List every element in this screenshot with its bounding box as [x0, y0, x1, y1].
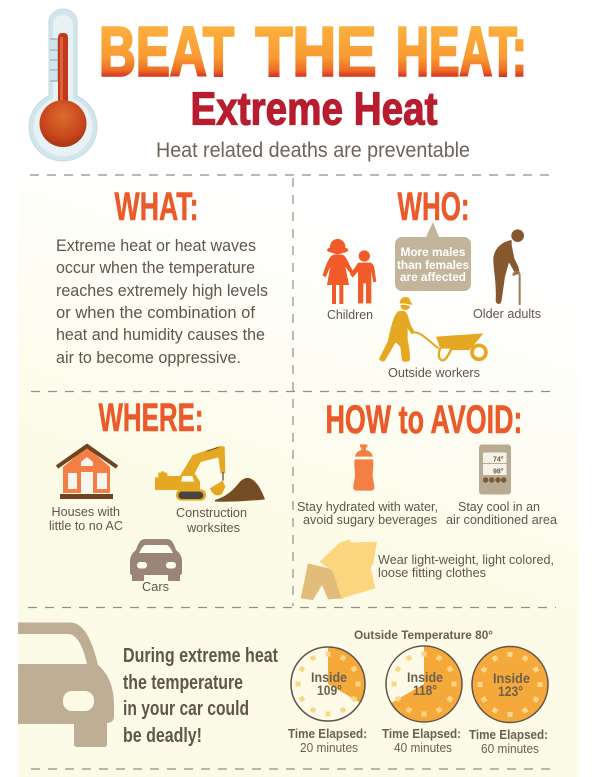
what body text: heat and humidity causes the [56, 326, 265, 344]
callout: more males: More males [400, 245, 466, 259]
icon: water bottle [353, 444, 374, 491]
callout: more males [395, 222, 471, 291]
title [99, 13, 527, 91]
icon: older adult [493, 229, 524, 305]
label: clothes [378, 552, 554, 580]
what body text: or when the combination of [56, 304, 255, 322]
label: houses: Houses with [52, 504, 120, 519]
label: stay cool: air conditioned area [446, 512, 558, 527]
icon: children [323, 239, 376, 304]
callout: more males: than females [397, 258, 469, 272]
chart: 20 minutes clock: Inside [311, 669, 347, 685]
label: older adults: Older adults [473, 306, 541, 321]
what body text: occur when the temperature [56, 259, 255, 277]
chart: 40 minutes clock: Inside [407, 669, 443, 685]
title: BEAT [99, 13, 234, 91]
label: 60 minutes: 60 minutes [481, 742, 539, 756]
heading: where: WHERE: [98, 396, 204, 440]
callout: more males: are affected [400, 270, 466, 284]
label: children: Children [327, 307, 373, 322]
panel: what [56, 185, 268, 367]
subtitle: Extreme Heat: Extreme Heat [190, 82, 438, 134]
label: stay cool [446, 499, 558, 527]
label: construction: Construction [176, 505, 247, 520]
icon: thermometer [29, 9, 97, 161]
chart: 60 minutes clock [472, 646, 548, 722]
title: HEAT: [396, 13, 527, 91]
icon: large car [18, 622, 114, 747]
label: stay hydrated: Stay hydrated with water, [297, 499, 438, 514]
warning text [123, 645, 278, 747]
icon: house [57, 446, 117, 499]
label: clothes: Wear light-weight, light colored, [378, 552, 554, 567]
label: 40 minutes [382, 727, 461, 755]
background wash [18, 178, 578, 777]
title: THE [256, 13, 376, 91]
panel: who [323, 185, 541, 380]
label: construction [176, 505, 247, 535]
label: 60 minutes: Time Elapsed: [469, 728, 548, 742]
icon: excavator [155, 446, 265, 502]
icon: car [130, 539, 182, 581]
chart: 40 minutes clock: 118° [413, 682, 437, 698]
warning text: in your car could [123, 698, 249, 720]
label: stay hydrated: avoid sugary beverages [303, 512, 437, 527]
label: stay cool: Stay cool in an [458, 499, 540, 514]
panel: car warning [18, 622, 548, 756]
label: 20 minutes [288, 727, 367, 755]
heading: who: WHO: [398, 185, 470, 229]
icon: thermostat [479, 444, 511, 494]
label: houses [49, 504, 123, 533]
panel: where [49, 396, 265, 594]
label: 60 minutes [469, 728, 548, 756]
label: stay hydrated [297, 499, 438, 527]
label: 40 minutes: Time Elapsed: [382, 727, 461, 741]
label: construction: worksites [186, 520, 240, 535]
label: 20 minutes: Time Elapsed: [288, 727, 367, 741]
icon: clothes [301, 539, 377, 600]
icon: outside worker with wheelbarrow [379, 297, 486, 362]
panel: how to avoid [297, 398, 558, 600]
label: houses: little to no AC [49, 518, 123, 533]
tagline: Heat related deaths are preventable [156, 139, 470, 162]
warning text: the temperature [123, 672, 243, 694]
chart: 60 minutes clock: Inside [493, 670, 530, 686]
warning text: be deadly! [123, 725, 202, 747]
label: 20 minutes: 20 minutes [300, 741, 358, 755]
label: outside workers: Outside workers [388, 365, 480, 380]
label: cars: Cars [142, 579, 169, 594]
icon: thermostat: 74° [493, 456, 504, 464]
what body text: Extreme heat or heat waves [56, 237, 256, 255]
label: 40 minutes: 40 minutes [394, 741, 452, 755]
heading: what: WHAT: [114, 185, 198, 229]
chart: 20 minutes clock: 109° [317, 682, 342, 698]
label: clothes: loose fitting clothes [378, 565, 486, 580]
chart: 40 minutes clock [386, 646, 462, 722]
what body text: reaches extremely high levels [56, 282, 268, 300]
chart: 20 minutes clock [291, 647, 365, 721]
warning text: During extreme heat [123, 645, 278, 667]
icon: thermostat: 98° [493, 468, 504, 476]
what body text [56, 237, 268, 367]
what body text: air to become oppressive. [56, 349, 241, 367]
label: outside temperature: Outside Temperature 80° [354, 630, 493, 642]
chart: 60 minutes clock: 123° [498, 683, 523, 699]
